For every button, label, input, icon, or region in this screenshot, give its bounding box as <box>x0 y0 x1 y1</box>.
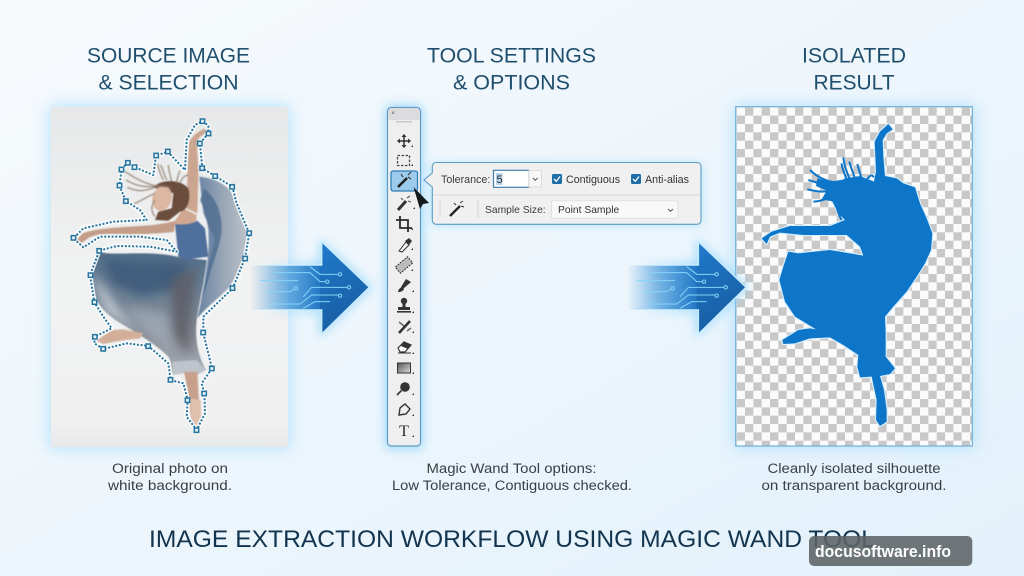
caption: result: on transparent background. <box>762 478 946 493</box>
icon: type: T <box>399 423 409 440</box>
tolerance field: 5 <box>496 174 503 186</box>
icon: brush <box>398 279 411 292</box>
panel: tool options popup <box>424 162 701 224</box>
icon: crop <box>396 216 412 232</box>
heading: tool settings and options: TOOL SETTINGS <box>427 44 596 68</box>
heading: source image and selection: SOURCE IMAGE <box>87 44 250 68</box>
caption: result: Cleanly isolated silhouette <box>768 461 940 476</box>
caption: result <box>762 461 946 493</box>
sample size dropdown <box>485 201 678 218</box>
icon: magic wand selected <box>391 171 418 191</box>
icon: pen <box>399 404 410 415</box>
caption: tool options: Low Tolerance, Contiguous checked. <box>392 478 632 493</box>
panel: toolbar: « <box>392 110 396 116</box>
tolerance field <box>441 170 542 187</box>
caption: source: white background. <box>107 478 232 493</box>
icon: move <box>398 134 410 148</box>
panel: toolbar <box>385 105 423 449</box>
heading: isolated result <box>802 44 906 94</box>
tool corner markers <box>411 145 415 437</box>
anti-alias checkbox: Anti-alias <box>645 174 689 186</box>
heading: isolated result: RESULT <box>814 70 894 94</box>
caption: tool options: Magic Wand Tool options: <box>426 461 596 476</box>
icon: dodge <box>397 382 410 395</box>
panel: source photo with selection <box>49 105 290 449</box>
watermark <box>809 536 972 566</box>
arrow: tools to result <box>625 238 750 338</box>
circuit lines <box>260 267 351 308</box>
selection marquee <box>71 119 251 432</box>
icon: mouse cursor <box>414 187 429 209</box>
icon: eraser <box>398 342 411 353</box>
circuit lines <box>637 267 727 308</box>
icon: eyedropper <box>399 238 412 252</box>
caption: tool options <box>392 461 632 493</box>
arrow: photo to tools <box>248 238 373 338</box>
sample size dropdown: Sample Size: <box>485 205 546 216</box>
wand preset icon <box>440 200 478 218</box>
heading: source image and selection: & SELECTION <box>98 70 238 94</box>
heading: source image and selection <box>87 44 250 94</box>
icon: stamp <box>397 298 411 313</box>
icon: mixer brush <box>399 321 411 333</box>
dancer photo <box>77 128 247 427</box>
watermark: docusoftware.info <box>815 543 951 561</box>
caption: source: Original photo on <box>112 461 228 476</box>
icon: patch <box>395 257 413 273</box>
panel: isolated result on checkerboard <box>733 105 975 448</box>
icon: marquee <box>398 156 410 166</box>
tolerance field: Tolerance: <box>441 174 490 186</box>
dancer silhouette <box>762 124 932 426</box>
icon: healing wand <box>398 196 411 210</box>
heading: tool settings and options <box>427 44 596 94</box>
main title: IMAGE EXTRACTION WORKFLOW USING MAGIC WAND TOOL <box>149 526 875 553</box>
caption: source <box>107 461 232 493</box>
heading: isolated result: ISOLATED <box>802 44 906 68</box>
heading: tool settings and options: & OPTIONS <box>453 70 570 94</box>
icon: gradient <box>398 363 410 373</box>
sample size dropdown: Point Sample <box>558 205 620 216</box>
contiguous checkbox: Contiguous <box>566 174 620 186</box>
